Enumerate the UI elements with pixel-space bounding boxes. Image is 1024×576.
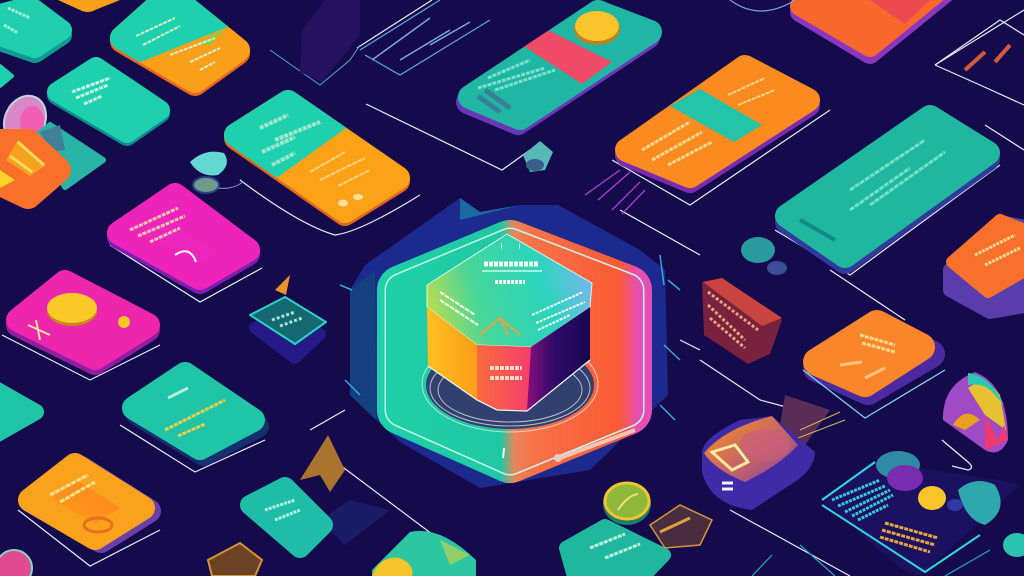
rays connector [780, 395, 845, 445]
card: teal lower left center [134, 374, 257, 454]
icon: paperclip [942, 440, 972, 470]
red band [522, 30, 612, 84]
outer blue shield [350, 198, 668, 488]
card: big teal right [787, 117, 988, 262]
icon: water drop orb [190, 152, 243, 193]
panel: bottom right dark tablet [822, 451, 1020, 576]
card: top-left teal [0, 6, 62, 53]
glowing ring [402, 245, 627, 458]
card: magenta upper [119, 195, 248, 282]
box: orange purple device [702, 416, 815, 510]
icon: orb near teal card [741, 237, 787, 275]
icon: teal orb bottom right [1003, 533, 1024, 557]
teal band [670, 89, 762, 142]
card: orange with teal band [627, 67, 808, 181]
icon: gold coin [47, 293, 97, 326]
card: teal middle left [57, 67, 160, 136]
card: small left teal [0, 66, 12, 86]
card: teal and orange top [90, 0, 260, 84]
spark accents beside the emblem [340, 255, 680, 420]
cube front face [477, 345, 531, 411]
icon: gold coin [918, 486, 946, 510]
cube top face [427, 234, 592, 347]
card: orange left [0, 140, 58, 196]
icon: colorful pie dome [943, 372, 1008, 452]
icon: glass disc [0, 89, 54, 151]
card: bottom green orange [372, 531, 476, 576]
teal section [224, 90, 346, 178]
panel: dark teal small card [250, 275, 326, 358]
card: orange box right [803, 324, 945, 418]
cube right face [527, 307, 590, 411]
cube left face [427, 307, 477, 400]
bottom spark [503, 448, 504, 458]
icon: small capsule above orange card [523, 141, 553, 172]
rays near orange card [585, 170, 645, 214]
panel: top wireframe device [270, 0, 490, 85]
card: teal behind orange [38, 125, 103, 187]
bottom right glint [560, 430, 635, 458]
central hexagon emblem [350, 198, 668, 488]
icon: pink disc bottom left [0, 550, 32, 576]
card: orange bottom left [30, 465, 149, 541]
teal section [110, 0, 228, 62]
card: teal far left [0, 388, 36, 436]
cube labels [440, 246, 585, 378]
card: top center teal with coin [468, 11, 650, 123]
card: bottom teal center right [566, 526, 664, 576]
panel: top center-right outline [730, 0, 795, 11]
icon: blue blob [876, 451, 920, 479]
icon: gold coin [574, 11, 620, 45]
coin: green gold bottom center [603, 483, 651, 525]
icon: brown device bottom [650, 505, 712, 548]
icon: teal blob [958, 481, 1001, 525]
panel: red brochure box [702, 278, 782, 364]
arrow mark on cube [480, 318, 520, 335]
line accents bottom right [752, 545, 990, 576]
icon: bottom small orange box [208, 543, 262, 576]
card: right orange box [950, 220, 1024, 312]
card: top orange strip [58, 0, 120, 12]
card: teal bottom center left [250, 435, 390, 548]
card: large teal and orange [224, 90, 410, 226]
card: magenta lower with coin [18, 282, 148, 363]
panel: top right wireframe [935, 20, 1024, 70]
card: top right orange [800, 0, 950, 54]
inner swirl shadow [426, 341, 594, 429]
icon: dark bag [300, 0, 360, 82]
